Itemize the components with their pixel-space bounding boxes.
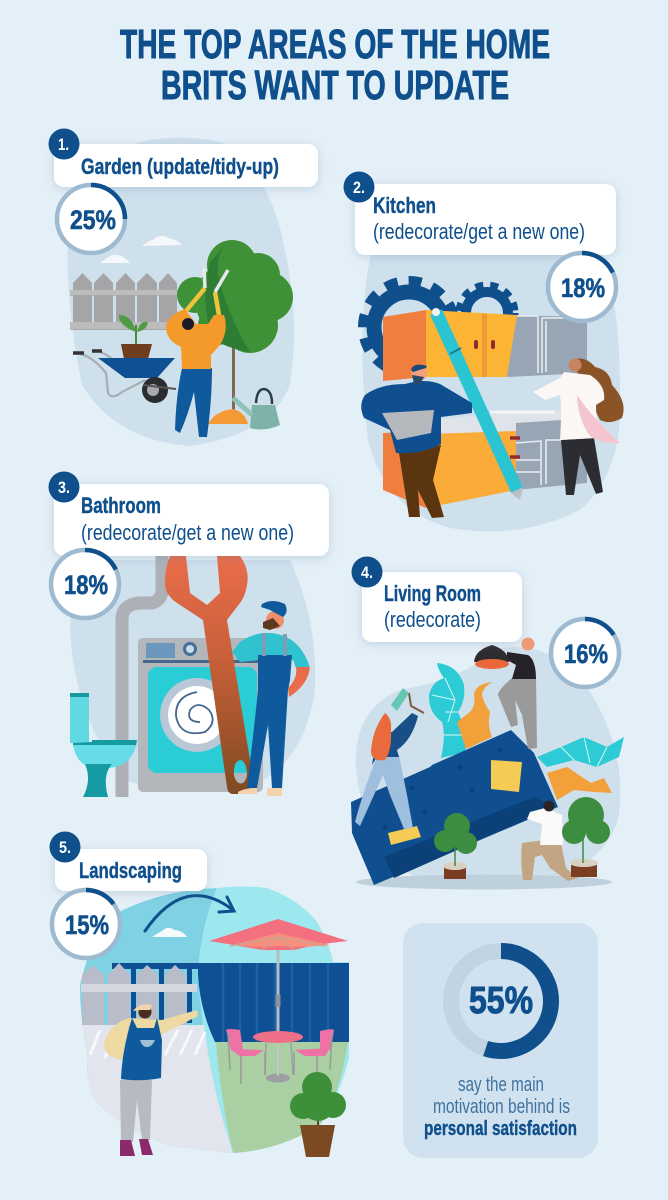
label: garden: [54, 144, 318, 187]
arrow: [145, 896, 234, 931]
washing machine: [138, 638, 263, 792]
label: kitchen: Kitchen: [373, 193, 436, 218]
badge 1: [48, 128, 80, 160]
right after half of scene: [198, 886, 349, 1153]
ring: 25%: [57, 185, 125, 253]
ring: 18%: 18%: [561, 273, 605, 303]
giant wrench: [165, 556, 252, 794]
ring: 18%: [548, 253, 616, 321]
title: BRITS WANT TO UPDATE: [161, 62, 509, 108]
motivation caption: motivation behind is: [433, 1096, 570, 1118]
gears: [363, 281, 515, 373]
label: bathroom: [54, 484, 329, 556]
label: living room: Living Room: [384, 581, 481, 606]
badge 5: 5.: [59, 838, 71, 857]
label: landscaping: [55, 849, 207, 891]
donut chart 55%: 55%: [469, 980, 533, 1022]
badge 4: 4.: [361, 563, 373, 582]
fence: [70, 273, 180, 330]
motivation caption: personal satisfaction: [424, 1118, 577, 1140]
clouds: [100, 236, 182, 263]
label: landscaping: Landscaping: [79, 858, 182, 883]
upper cabinets: [383, 310, 587, 381]
label: kitchen: [355, 184, 616, 255]
living room backdrop blob: [356, 647, 620, 880]
panel: landscaping: [80, 886, 349, 1157]
label: bathroom: Bathroom: [81, 493, 161, 518]
gardener with overalls: [104, 1004, 198, 1156]
badge 2: [344, 172, 374, 202]
motivation caption: say the main: [458, 1074, 544, 1096]
patio umbrella: [209, 919, 348, 1035]
ring: 15%: 15%: [65, 910, 109, 940]
left before half of scene: [80, 888, 233, 1153]
ring: 16%: 16%: [564, 639, 608, 669]
teal and orange leaves: [429, 663, 624, 800]
watering can: [233, 389, 280, 429]
lower cabinets and counter: [383, 410, 587, 508]
right grass: [216, 1042, 348, 1153]
title: [120, 21, 550, 108]
badge 2: 2.: [353, 178, 365, 197]
tree: [177, 240, 293, 424]
giant pencil: [432, 308, 523, 500]
badge 1: 1.: [58, 135, 69, 154]
man with lamp: [474, 638, 537, 749]
blue fence: [198, 963, 349, 1042]
wheelbarrow with plant: [73, 315, 176, 403]
badge 5: [50, 832, 80, 862]
sofa: [351, 730, 558, 885]
label: living room: (redecorate): [384, 607, 481, 632]
donut chart 55%: [451, 951, 551, 1051]
ring: 18%: [51, 550, 119, 618]
motivation caption: [424, 1074, 577, 1140]
ring: 25%: 25%: [70, 205, 116, 235]
bathroom backdrop blob: [70, 560, 315, 791]
ring: 16%: [551, 619, 619, 687]
kneeling man: [521, 800, 578, 881]
patio table and chairs: [226, 1029, 334, 1084]
woman with roller: [355, 688, 424, 829]
plants: [434, 797, 610, 879]
left ground: [82, 1025, 233, 1153]
potted shrub: [290, 1072, 346, 1157]
panel: motivation stat: [403, 923, 598, 1158]
badge 3: 3.: [58, 478, 70, 497]
man with laptop: [361, 365, 472, 518]
ring: 15%: [52, 890, 120, 958]
badge 4: [352, 556, 382, 588]
drain pipe: [122, 556, 162, 797]
panel: kitchen: [361, 250, 624, 531]
panel: bathroom: [70, 556, 315, 797]
woman: [533, 358, 624, 495]
label: garden: Garden (update/tidy-up): [81, 154, 279, 179]
floor shadow: [356, 874, 612, 890]
garden backdrop blob: [68, 138, 294, 446]
panel: living room: [351, 638, 624, 890]
ring: 18%: 18%: [64, 570, 108, 600]
old fence: [81, 963, 205, 1058]
kitchen backdrop blob: [362, 250, 620, 531]
label: bathroom: (redecorate/get a new one): [81, 520, 294, 545]
cloud: [152, 928, 187, 937]
toilet: [70, 693, 137, 797]
label: living room: [362, 572, 522, 642]
badge 3: [48, 472, 80, 502]
plumber: [232, 601, 310, 796]
gardener: [166, 268, 228, 437]
label: kitchen: (redecorate/get a new one): [373, 219, 585, 244]
panel: garden: [68, 138, 294, 446]
